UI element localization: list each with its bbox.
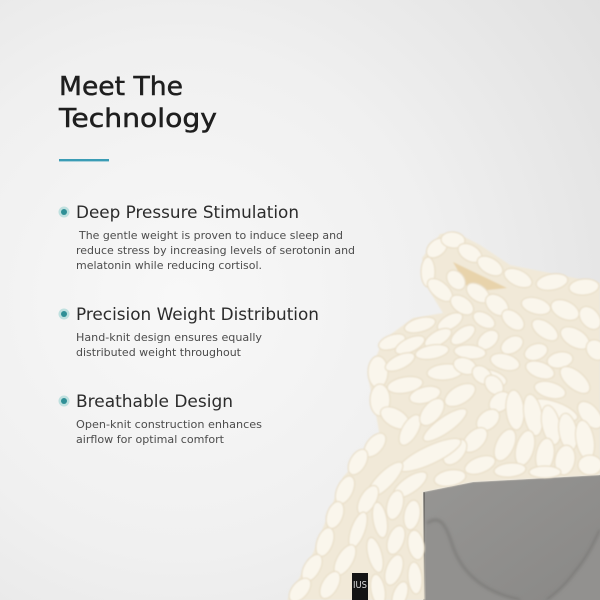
- description: distributed weight throughout: [76, 346, 242, 359]
- description: [76, 331, 262, 359]
- title: Meet The: [59, 72, 183, 102]
- knit stitches: middle band: [368, 309, 600, 434]
- knit stitches: folded knot: [395, 354, 600, 489]
- blanket tag: [352, 573, 368, 600]
- description: [76, 418, 262, 446]
- description: airflow for optimal comfort: [76, 433, 225, 446]
- description: Hand-knit design ensures equally: [76, 331, 262, 344]
- description: melatonin while reducing cortisol.: [76, 259, 262, 272]
- description: reduce stress by increasing levels of serotonin and: [76, 244, 355, 257]
- title: [58, 72, 217, 134]
- knit stitches: upper loop: [421, 231, 600, 364]
- heading: Breathable Design: [76, 392, 233, 412]
- concrete pedestal: [423, 475, 600, 600]
- icon: teal bullet: [58, 206, 70, 218]
- feature: deep pressure stimulation: [58, 203, 355, 272]
- title accent line: [59, 159, 109, 161]
- feature: precision weight distribution: [58, 305, 319, 359]
- icon: teal bullet: [58, 308, 70, 320]
- icon: teal bullet: [58, 396, 70, 406]
- title: Technology: [58, 104, 217, 134]
- heading: Precision Weight Distribution: [76, 305, 319, 325]
- description: The gentle weight is proven to induce sleep and: [78, 229, 343, 242]
- chunky knit blanket: [285, 231, 600, 600]
- description: [76, 229, 355, 272]
- feature: breathable design: [58, 392, 262, 446]
- heading: Deep Pressure Stimulation: [76, 203, 299, 223]
- description: Open-knit construction enhances: [76, 418, 262, 431]
- blanket tag: IUS: [353, 580, 367, 591]
- knit stitches: hanging drape: [285, 429, 431, 600]
